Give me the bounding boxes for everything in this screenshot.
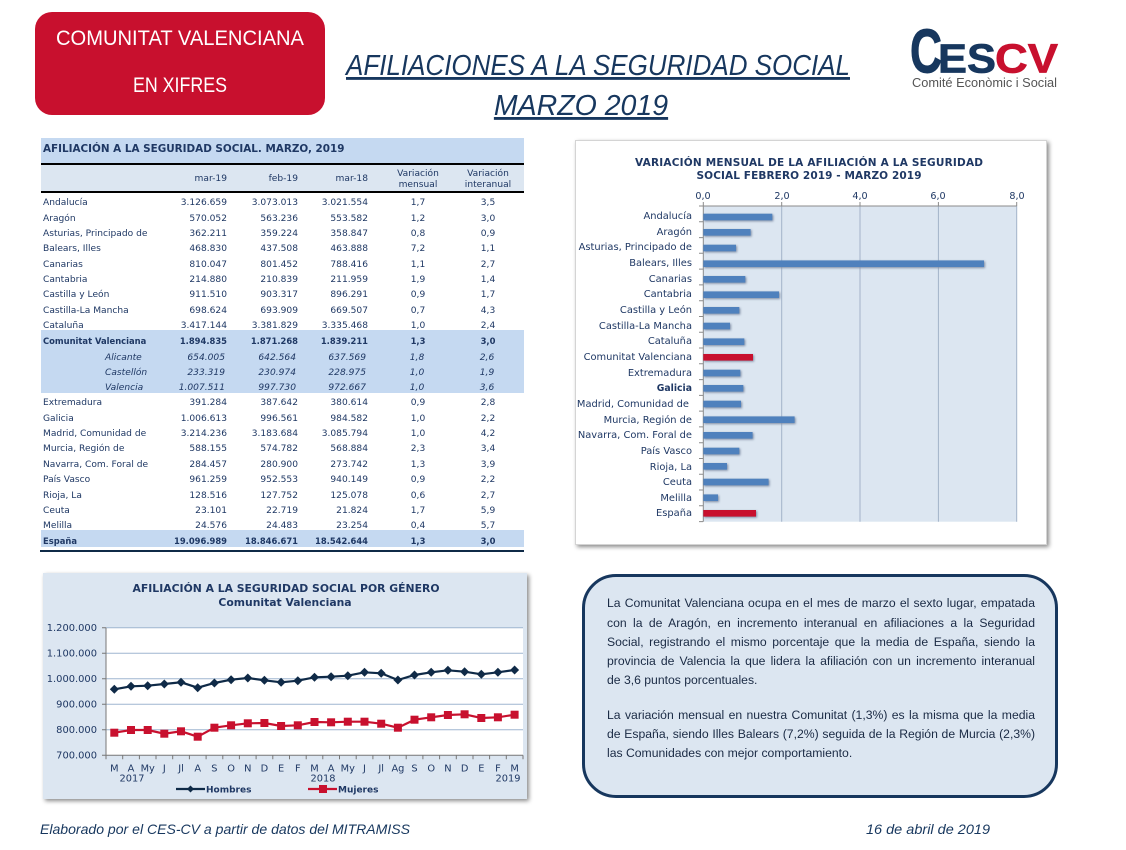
highlight bands [40,330,524,552]
region labels: Cataluña [648,336,692,347]
row: Asturias: 359.224 [260,229,298,239]
row: Cataluña: 1,0 [411,321,425,331]
x axis labels: Ag [391,764,404,774]
row: Alicante: 637.569 [328,353,366,363]
x axis labels: E [478,764,484,774]
chart title: Comunitat Valenciana [218,596,352,609]
row: Balears [43,244,495,254]
row: Castellón: 233.319 [187,368,225,378]
row: Madrid: 4,2 [481,429,495,439]
row: Castellón: 228.975 [328,368,366,378]
row: País Vasco: 0,9 [411,475,425,485]
x axis labels: 2017 [120,774,144,784]
row: Navarra: 3,9 [481,460,495,470]
region labels: Extremadura [628,368,692,379]
chart card [43,573,527,799]
row: Canarias: 810.047 [189,260,227,270]
row: Rioja: 0,6 [411,491,425,501]
row: Castellón [105,367,494,378]
region labels: Asturias, Principado de [579,242,692,253]
value axis labels: 0,0 [695,191,711,202]
row: Cantabria: 214.880 [189,275,227,285]
y axis labels: 800.000 [56,725,97,736]
chart title [132,582,440,609]
row: Asturias: 358.847 [330,229,368,239]
row: Extremadura: 2,8 [481,398,495,408]
row: Valencia: 1,0 [410,383,424,393]
column headers: mar-19 [195,174,227,184]
region labels [577,210,692,519]
row: Comunitat Valenciana: 1.871.268 [251,336,298,346]
row: Navarra: 273.742 [330,460,368,470]
row: Aragón: 570.052 [189,214,227,224]
x axis labels: M [110,764,119,774]
chart title: AFILIACIÓN A LA SEGURIDAD SOCIAL POR GÉNERO [132,582,440,595]
x axis labels: My [141,764,155,774]
panel: gender line chart [43,573,527,799]
line: Mujeres [114,714,515,737]
row: Rioja: 125.078 [330,491,368,501]
x axis labels [110,764,520,784]
row: Comunitat Valenciana: 1.839.211 [321,336,368,346]
row: Alicante: Alicante [104,353,142,363]
row: Andalucía [43,198,495,208]
row: Castilla y León: 1,7 [481,290,495,300]
row: Ceuta: 23.101 [195,506,227,516]
row: Comunitat Valenciana: 1,3 [411,336,426,346]
x axis labels: F [295,764,301,774]
x axis labels: N [244,764,251,774]
region labels: Castilla-La Mancha [599,321,692,332]
x axis labels: E [278,764,284,774]
x axis labels: F [495,764,501,774]
row: Castellón: 230.974 [258,368,296,378]
row: Canarias: 788.416 [330,260,368,270]
row: Cantabria: 1,4 [481,275,495,285]
column headers: mensual [399,180,437,190]
row: Castilla-La Mancha: 4,3 [481,306,495,316]
title [344,50,850,122]
row: Cataluña: 3.335.468 [322,321,368,331]
row: Asturias: 0,8 [411,229,425,239]
row: Ceuta [43,506,495,516]
region labels: Balears, Illes [629,258,692,269]
row: Navarra: 284.457 [189,460,227,470]
row: Castilla y León [43,289,495,300]
row: Valencia [105,383,494,393]
legend: Hombres [206,786,251,796]
row: Andalucía: 3.126.659 [181,198,227,208]
row: Ceuta: 1,7 [411,506,425,516]
row: Navarra: 1,3 [411,460,425,470]
row: Alicante [104,353,494,363]
row: Galicia: 984.582 [330,414,368,424]
x axis labels: M [510,764,519,774]
legend: Mujeres [338,786,378,796]
y axis labels: 1.100.000 [47,648,97,660]
row: Valencia: 1.007.511 [179,383,225,393]
row: Castilla y León: 0,9 [411,290,425,300]
footer date: 16 de abril de 2019 [866,821,990,837]
row: Rioja: 128.516 [189,491,227,501]
header badge: Comunitat Valenciana en xifres [35,12,325,115]
row: Cataluña: 2,4 [481,321,495,331]
plot area with gridlines [102,628,523,759]
row: Andalucía: 1,7 [411,198,425,208]
region labels: Cantabria [644,289,692,300]
region labels: Madrid, Comunidad de [577,399,689,410]
title: MARZO 2019 [494,90,668,122]
column headers: Variación [467,168,509,179]
row: España: 1,3 [411,536,426,546]
row: Madrid [43,429,495,439]
row: Rioja [43,491,495,501]
row: Andalucía: Andalucía [43,198,88,208]
row: Ceuta: 5,9 [481,506,495,516]
chart title: SOCIAL FEBRERO 2019 - MARZO 2019 [696,170,922,182]
row: Rioja: 2,7 [481,491,495,501]
row: Balears: 437.508 [260,244,298,254]
callout: commentary [582,574,1058,798]
commentary paragraph 1: Social, registrando el mismo porcentaje que la media de España, siendo la [607,635,1035,649]
panel: monthly variation bar chart [576,140,1046,544]
row: Canarias: 2,7 [481,260,495,270]
row: Murcia: 588.155 [189,444,227,454]
row: Melilla [43,521,495,531]
row: Galicia: 2,2 [481,414,495,424]
x axis labels: D [461,764,468,774]
row: Canarias: Canarias [43,260,83,270]
commentary paragraph 2: La variación mensual en nuestra Comunitat (1,3%) es la misma que la media [607,708,1035,722]
row: Murcia: Murcia, Región de [43,443,125,454]
row: Valencia: Valencia [105,383,143,393]
header badge: Comunitat Valenciana en xifres: COMUNITAT VALENCIANA [56,27,304,50]
row: Murcia: 568.884 [330,444,368,454]
row: Valencia: 997.730 [258,383,296,393]
row: Alicante: 654.005 [187,353,225,363]
row: Alicante: 2,6 [480,353,494,363]
region labels: Rioja, La [650,462,692,473]
commentary paragraph 2 [607,708,1036,760]
row: Asturias: 0,9 [481,229,495,239]
row: Asturias [43,229,495,239]
row: Murcia: 574.782 [260,444,298,454]
row: Cantabria: 211.959 [330,275,368,285]
logo: CES-CV: ES [938,36,996,82]
x axis labels: J [162,764,166,774]
row: Balears: Balears, Illes [43,244,101,254]
row: Aragón: Aragón [43,213,76,224]
row: Castilla y León: 903.317 [260,290,298,300]
value axis labels: 6,0 [930,191,946,202]
row: Canarias [43,260,495,270]
x axis labels: S [411,764,418,774]
value axis labels: 4,0 [852,191,868,202]
row: País Vasco: 940.149 [330,475,368,485]
x axis labels: Jl [177,764,184,774]
row: Balears: 1,1 [481,244,495,254]
row: Aragón [43,213,495,224]
y axis labels: 700.000 [56,750,97,762]
commentary paragraph 1: con la de Aragón, en incremento interanual en afiliaciones a la Seguridad [607,616,1035,630]
row: Canarias: 801.452 [260,260,298,270]
value axis labels: 8,0 [1009,191,1025,202]
row: Extremadura: 0,9 [411,398,425,408]
row: Extremadura: 380.614 [330,398,368,408]
row: Galicia: 1.006.613 [181,414,227,424]
table title band [41,138,524,163]
row: España: 19.096.989 [174,536,227,546]
row: Aragón: 1,2 [411,214,425,224]
row: Balears: 468.830 [189,244,227,254]
chart title [635,156,983,182]
row: España [43,536,496,546]
bars [703,214,984,517]
row: País Vasco: 2,2 [481,475,495,485]
row: Aragón: 563.236 [260,214,298,224]
row: Aragón: 3,0 [481,214,495,224]
row: Comunitat Valenciana: Comunitat Valenciana [43,336,146,346]
x axis labels: J [362,764,366,774]
row: Valencia: 972.667 [328,383,366,393]
region labels: Murcia, Región de [604,414,692,426]
row: Castilla y León: 911.510 [189,290,227,300]
region labels: Castilla y León [620,304,692,316]
column headers: mar-18 [336,174,368,184]
x axis labels: A [194,764,201,774]
y axis labels: 900.000 [56,700,97,710]
row: Andalucía: 3,5 [481,198,495,208]
region labels: Melilla [660,493,692,504]
column headers: feb-19 [269,174,298,184]
region labels: España [656,508,692,519]
x axis labels: 2018 [311,774,335,784]
footer source: Elaborado por el CES-CV a partir de datos del MITRAMISS [40,821,411,837]
commentary paragraph 2: las Comunidades con mejor comportamiento. [607,746,852,760]
x axis labels: M [310,764,319,774]
row: Alicante: 1,8 [410,353,424,363]
legend [176,785,378,796]
row: Murcia [43,443,495,454]
row: Rioja: 127.752 [260,491,298,501]
row: Galicia: 996.561 [260,414,298,424]
row: Castellón: Castellón [105,367,147,378]
row: Alicante: 642.564 [258,353,296,363]
row: País Vasco: País Vasco [43,475,91,485]
row: Cataluña [43,321,495,331]
row: Ceuta: 22.719 [266,506,298,516]
row: España: 3,0 [481,536,496,546]
x axis labels: S [211,764,218,774]
row: Madrid: Madrid, Comunidad de [43,429,147,439]
x axis labels: O [227,764,235,774]
row: Balears: 463.888 [330,244,368,254]
row: Castilla-La Mancha: 693.909 [260,306,298,316]
row: Extremadura: 391.284 [189,398,227,408]
value axis labels [695,191,1025,202]
value axis labels: 2,0 [774,191,790,202]
x axis labels: Jl [377,764,384,774]
region labels: Galicia [657,383,692,394]
region labels: Aragón [657,226,692,238]
region labels: País Vasco [641,445,692,457]
row: Madrid: 3.085.794 [322,429,368,439]
row: Castilla-La Mancha: 698.624 [189,306,227,316]
region labels: Canarias [649,274,692,285]
plot area with gridlines [699,202,1017,522]
row: Murcia: 3,4 [481,444,495,454]
row: Galicia: 1,0 [411,414,425,424]
x axis labels: A [328,764,335,774]
x axis labels: My [341,764,355,774]
x axis labels: O [427,764,435,774]
row: Galicia [43,414,495,424]
row: Extremadura: Extremadura [43,398,102,408]
line: Hombres [114,670,515,689]
commentary paragraph 2: de España, siendo Illes Balears (7,2%) seguida de la Región de Murcia (2,3%) [607,727,1035,741]
logo: CES-CV [910,18,1059,90]
logo: CES-CV: C [910,18,942,86]
row: Madrid: 1,0 [411,429,425,439]
commentary paragraph 1: provincia de Valencia la que lidera la afiliación con un incremento interanual [607,654,1035,668]
row: Navarra: Navarra, Com. Foral de [43,460,149,470]
chart title: VARIACIÓN MENSUAL DE LA AFILIACIÓN A LA SEGURIDAD [635,156,983,169]
logo: CES-CV: Comité Econòmic i Social [912,76,1057,90]
row: Cataluña: 3.381.829 [252,321,298,331]
y axis labels: 1.000.000 [47,674,97,685]
row: Castilla-La Mancha: Castilla-La Mancha [43,306,129,316]
row: Ceuta: 21.824 [336,506,368,516]
row: Cantabria: Cantabria [43,275,87,285]
row: Castilla y León: Castilla y León [43,289,109,300]
row: Madrid: 3.214.236 [181,429,227,439]
y axis labels [47,623,97,762]
x axis labels: D [261,764,268,774]
row: País Vasco: 961.259 [189,475,227,485]
row: Galicia: Galicia [43,414,74,424]
chart card [576,140,1046,544]
row: País Vasco: 952.553 [260,475,298,485]
region labels: Navarra, Com. Foral de [578,430,692,441]
row: Melilla: 5,7 [481,521,495,531]
row: Extremadura [43,398,495,408]
row: Aragón: 553.582 [330,214,368,224]
row: Balears: 7,2 [411,244,425,254]
row: Melilla: 23.254 [336,521,368,531]
row: Rioja: Rioja, La [43,491,82,501]
row: Castilla-La Mancha [43,306,495,316]
row: Cataluña: Cataluña [43,321,84,331]
commentary paragraph 1: La Comunitat Valenciana ocupa en el mes de marzo el sexto lugar, empatada [607,596,1035,610]
row: Castilla-La Mancha: 669.507 [330,306,368,316]
x axis labels: A [128,764,135,774]
row: España: España [43,536,77,546]
y axis labels: 1.200.000 [47,623,97,634]
row: Canarias: 1,1 [411,260,425,270]
commentary paragraph 1: de 3,6 puntos porcentuales. [607,673,757,687]
row: Cantabria: 210.839 [260,275,298,285]
row: Castilla y León: 896.291 [330,290,368,300]
x axis labels: 2019 [496,774,520,784]
region labels: Ceuta [663,477,692,488]
row: Comunitat Valenciana: 3,0 [481,336,496,346]
x axis labels: N [444,764,452,774]
row: Melilla: 24.576 [195,521,227,531]
row: Extremadura: 387.642 [260,398,298,408]
row: Castellón: 1,9 [480,368,494,378]
row: Cataluña: 3.417.144 [181,321,227,331]
header badge: Comunitat Valenciana en xifres: EN XIFRES [133,74,227,97]
logo: CES-CV: CV [995,36,1059,82]
row: Castilla-La Mancha: 0,7 [411,306,425,316]
region labels: Andalucía [643,210,692,222]
commentary paragraph 1 [607,596,1036,687]
region labels: Comunitat Valenciana [584,352,692,363]
row: Murcia: 2,3 [411,444,425,454]
row: País Vasco [43,475,495,485]
row: Comunitat Valenciana [43,336,496,346]
row: Asturias: 362.211 [189,229,227,239]
row: España: 18.542.644 [315,536,368,546]
row: Madrid: 3.183.684 [252,429,298,439]
row: Comunitat Valenciana: 1.894.835 [180,336,227,346]
row: Valencia: 3,6 [480,383,494,393]
column headers [41,163,524,193]
row: Melilla: 24.483 [266,521,298,531]
row: Ceuta: Ceuta [43,506,70,516]
title: AFILIACIONES A LA SEGURIDAD SOCIAL [344,50,850,82]
row: Castellón: 1,0 [410,368,424,378]
row: Melilla: Melilla [43,521,72,531]
row: Cantabria [43,275,495,285]
data table [40,138,524,552]
row: Navarra: 280.900 [260,460,298,470]
row: Melilla: 0,4 [411,521,425,531]
column headers: interanual [465,180,511,190]
row: Andalucía: 3.021.554 [322,198,368,208]
row: Andalucía: 3.073.013 [252,198,298,208]
row: Cantabria: 1,9 [411,275,425,285]
row: España: 18.846.671 [245,536,298,546]
row: Navarra [43,460,495,470]
table title band: AFILIACIÓN A LA SEGURIDAD SOCIAL. MARZO, 2019 [43,142,344,155]
column headers: Variación [397,168,439,179]
row: Asturias: Asturias, Principado de [43,229,148,239]
